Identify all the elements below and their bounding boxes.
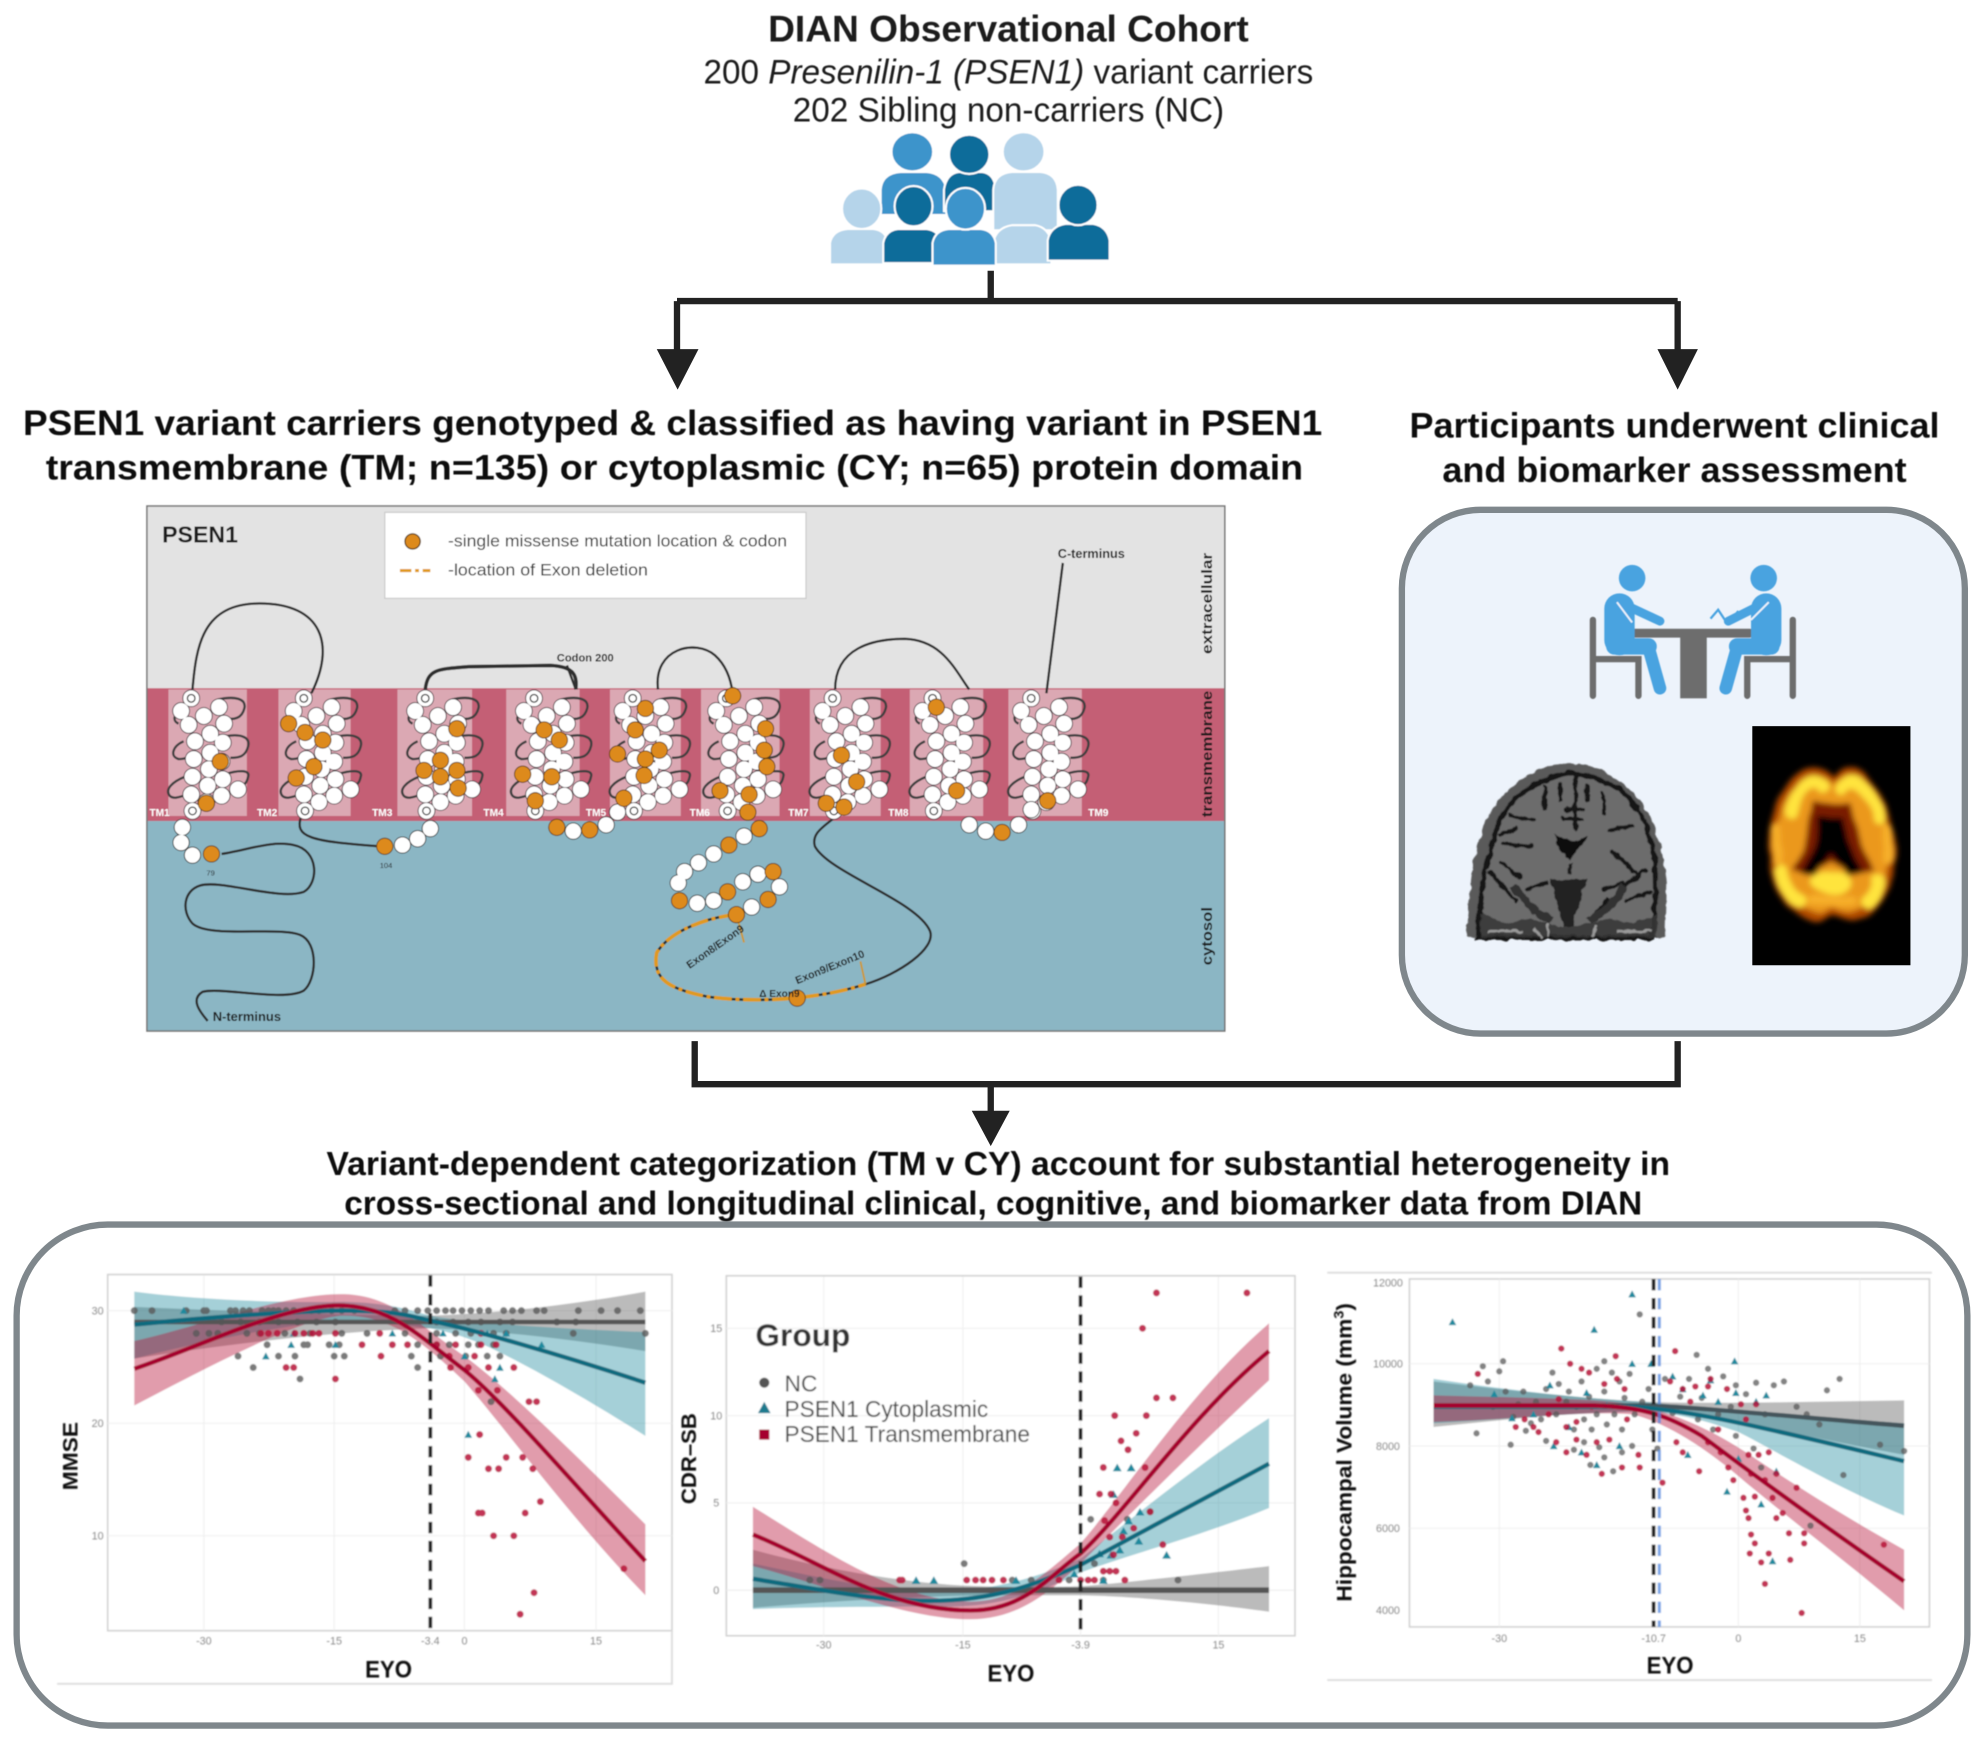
chart: hippocampal volume by EYO: 6000 [1376, 1523, 1400, 1535]
chart: hippocampal volume by EYO [1327, 1273, 1932, 1680]
chart: hippocampal volume by EYO: 4000 [1376, 1605, 1400, 1617]
chart: CDR-SB by EYO: 15 [1212, 1639, 1224, 1651]
diagram labels: cytosol [1199, 907, 1216, 965]
arrow: both branches merge to results [695, 1041, 1678, 1146]
transmembrane domain labels: TM8 [888, 808, 909, 819]
heading: PSEN1 variant classification: transmembrane (TM; n=135) or cytoplasmic (CY; n=65) protein domain [46, 447, 1303, 487]
chart: hippocampal volume by EYO: 3 [1331, 1310, 1347, 1319]
chart: MMSE by EYO [57, 1275, 672, 1684]
transmembrane domain labels: TM7 [788, 808, 809, 819]
transmembrane domain labels: TM9 [1088, 808, 1109, 819]
diagram labels: Exon9/Exon10 [794, 948, 866, 987]
transmembrane domain labels [149, 808, 1109, 819]
diagram labels: extracellular [1199, 553, 1216, 654]
chart: MMSE by EYO: 0 [461, 1636, 467, 1648]
diagram labels: PSEN1 [162, 522, 238, 548]
legend box: -location of Exon deletion [448, 561, 648, 580]
heading: PSEN1 variant classification [23, 403, 1322, 487]
chart: hippocampal volume by EYO: 10000 [1373, 1359, 1403, 1371]
exon deletion dashed path [656, 915, 865, 1000]
title block: DIAN Observational Cohort: 200 Presenilin-1 (PSEN1) variant carriers [704, 53, 1313, 91]
chart legend: Group: PSEN1 Transmembrane [785, 1421, 1030, 1447]
chart legend: Group: PSEN1 Cytoplasmic [785, 1396, 988, 1422]
chart: MMSE by EYO: 20 [92, 1418, 104, 1430]
chart: CDR-SB by EYO [677, 1276, 1295, 1687]
image: structural MRI brain slice [1466, 764, 1666, 937]
heading: clinical and biomarker assessment: Participants underwent clinical [1409, 406, 1940, 446]
title block: DIAN Observational Cohort: 202 Sibling non-carriers (NC) [793, 91, 1224, 129]
chart legend: Group [755, 1317, 1030, 1447]
chart: hippocampal volume by EYO: 12000 [1373, 1278, 1403, 1290]
chart: hippocampal volume by EYO: -30 [1492, 1633, 1507, 1645]
helix residues [168, 695, 248, 815]
chart: CDR-SB by EYO: EYO [988, 1660, 1034, 1687]
chart: hippocampal volume by EYO: EYO [1647, 1653, 1693, 1680]
linker residues [181, 810, 1031, 907]
transmembrane domain labels: TM1 [149, 808, 170, 819]
transmembrane helix bands [168, 689, 1082, 816]
diagram labels: 104 [380, 861, 392, 870]
diagram labels: Δ Exon9 [759, 989, 800, 1000]
chart: hippocampal volume by EYO: -10.7 [1641, 1633, 1666, 1645]
chart: MMSE by EYO: 10 [92, 1531, 104, 1543]
heading: variant-dependent categorization: Variant-dependent categorization (TM v CY) account for substantial heterogeneity in [327, 1145, 1670, 1182]
protein backbone loops [185, 563, 1063, 1021]
chart: CDR-SB by EYO: -3.9 [1071, 1639, 1090, 1651]
title block: DIAN Observational Cohort: DIAN Observational Cohort [768, 9, 1249, 50]
chart: CDR-SB by EYO: -30 [816, 1639, 832, 1651]
icon: group of people [830, 132, 1110, 266]
diagram labels: 79 [206, 868, 215, 877]
legend box [385, 512, 806, 598]
missense mutation residues [206, 696, 1048, 998]
panel: results charts [17, 1225, 1967, 1726]
transmembrane domain labels: TM6 [690, 808, 710, 819]
chart legend: Group: Group [755, 1317, 850, 1353]
chart: CDR-SB by EYO: -15 [955, 1639, 971, 1651]
diagram labels: transmembrane [1199, 691, 1216, 817]
heading: clinical and biomarker assessment: and biomarker assessment [1442, 450, 1907, 490]
heading: clinical and biomarker assessment [1409, 406, 1940, 490]
legend box: -single missense mutation location & codon [448, 532, 787, 551]
diagram labels [162, 522, 1216, 1024]
icon: clinician and participant at a table [1593, 565, 1793, 698]
panel: clinical and biomarker assessment [1402, 510, 1965, 1034]
heading: PSEN1 variant classification: PSEN1 variant carriers genotyped & classified as having variant in PSEN1 [23, 403, 1322, 443]
chart: MMSE by EYO: 15 [590, 1636, 602, 1648]
panel: PSEN1 protein topology diagram [147, 506, 1225, 1031]
image: PET brain scan [1752, 726, 1910, 965]
title block: DIAN Observational Cohort [704, 9, 1313, 129]
chart: MMSE by EYO: 30 [92, 1305, 104, 1317]
diagram labels: C-terminus [1058, 547, 1125, 561]
chart: MMSE by EYO: -3.4 [421, 1636, 440, 1648]
chart: hippocampal volume by EYO: Hippocampal Volume (mm [1332, 1333, 1356, 1602]
diagram labels: Codon 200 [557, 653, 614, 665]
arrow: cohort splits to two branches [657, 271, 1698, 390]
chart: CDR-SB by EYO: 5 [713, 1498, 719, 1510]
chart: hippocampal volume by EYO: 0 [1735, 1633, 1741, 1645]
diagram labels: Exon8/Exon9 [684, 923, 747, 972]
chart: MMSE by EYO: EYO [365, 1656, 412, 1683]
chart: CDR-SB by EYO: 10 [710, 1410, 722, 1422]
transmembrane domain labels: TM4 [483, 808, 504, 819]
transmembrane domain labels: TM2 [257, 808, 278, 819]
chart: CDR-SB by EYO: 0 [713, 1585, 719, 1597]
chart: hippocampal volume by EYO: 15 [1854, 1633, 1866, 1645]
transmembrane domain labels: TM5 [586, 808, 607, 819]
heading: variant-dependent categorization [327, 1145, 1670, 1221]
chart: CDR-SB by EYO: CDR–SB [677, 1413, 701, 1504]
chart: MMSE by EYO: -30 [196, 1636, 212, 1648]
chart: hippocampal volume by EYO: 8000 [1376, 1441, 1400, 1453]
chart: MMSE by EYO: -15 [326, 1636, 342, 1648]
chart: CDR-SB by EYO: 15 [710, 1323, 722, 1335]
chart: MMSE by EYO: MMSE [58, 1422, 82, 1490]
transmembrane domain labels: TM3 [372, 808, 393, 819]
diagram labels: N-terminus [213, 1010, 281, 1024]
chart legend: Group: NC [785, 1371, 817, 1397]
heading: variant-dependent categorization: cross-sectional and longitudinal clinical, cognitive, and biomarker data from DIAN [344, 1184, 1642, 1221]
chart: hippocampal volume by EYO: ) [1332, 1303, 1356, 1311]
